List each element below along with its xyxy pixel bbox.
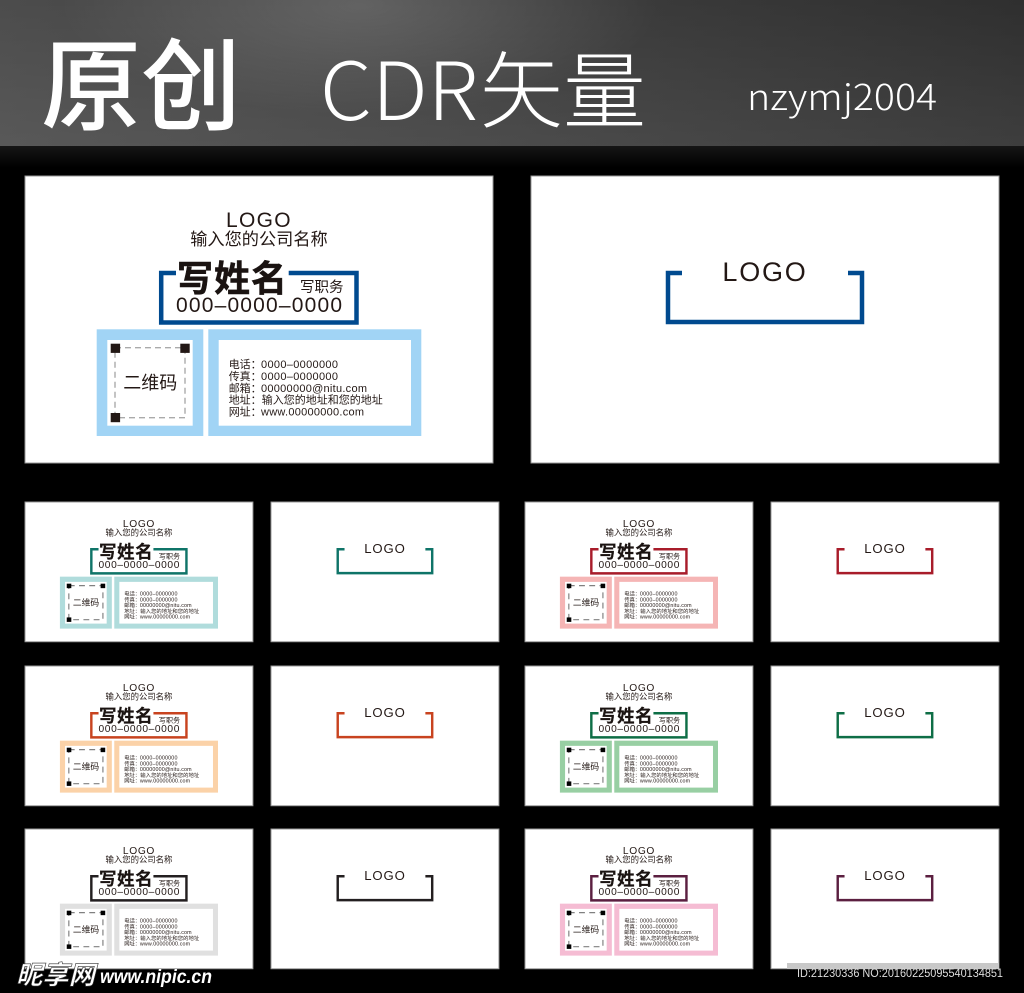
contact panel: 传真： [229,369,262,383]
logo text: LOGO [364,541,406,556]
person name: 写姓名 [599,542,653,562]
contact panel: 地址： [124,607,140,615]
contact panel: 网址： [624,777,640,785]
phone number: 000–0000–0000 [99,887,180,898]
job title: 写职务 [159,878,180,887]
company name: 输入您的公司名称 [106,855,172,865]
logo frame [838,549,932,573]
contact panel: www.00000000.com [639,615,691,621]
contact panel: 邮箱： [624,765,640,773]
QR panel [60,904,112,956]
person name: 写姓名 [99,542,153,562]
contact panel: 0000–0000000 [140,597,177,603]
contact panel: 传真： [124,595,140,603]
contact panel: 00000000@nitu.com [640,930,692,936]
contact panel: 输入您的地址和您的地址 [140,771,200,779]
contact panel: 00000000@nitu.com [261,383,367,395]
contact panel [114,904,218,956]
contact panel: 电话： [124,917,140,925]
contact panel: 00000000@nitu.com [140,767,192,773]
contact panel: 输入您的地址和您的地址 [140,607,200,615]
header banner [0,0,1024,168]
watermark: site logo: www.nipic.cn [100,967,212,988]
company name: 输入您的公司名称 [606,528,672,538]
job title: 写职务 [300,279,344,296]
contact panel: 电话： [229,358,262,371]
company name: 输入您的公司名称 [106,528,172,538]
green card: back [771,666,999,806]
contact panel: 输入您的地址和您的地址 [140,934,200,942]
QR panel: 二维码 [573,597,599,608]
logo frame [338,549,432,573]
logo text: LOGO [123,846,155,857]
contact panel [614,741,718,793]
QR panel: 二维码 [73,761,99,772]
orange card: back [271,666,499,806]
contact panel: 网址： [624,613,640,621]
black card: front [25,829,253,969]
logo text: LOGO [864,541,906,556]
name frame [91,713,186,737]
company name: 输入您的公司名称 [106,692,172,702]
phone number: 000–0000–0000 [599,887,680,898]
phone number: 000–0000–0000 [99,724,180,735]
name frame [591,876,686,900]
headline: original: 原创 [41,32,241,144]
logo text: LOGO [623,519,655,530]
logo frame [338,713,432,737]
phone number: 000–0000–0000 [599,724,680,735]
contact panel: 0000–0000000 [261,359,338,371]
logo text: LOGO [226,209,292,232]
contact panel: www.00000000.com [139,779,191,785]
job title: 写职务 [659,551,680,560]
QR panel: 二维码 [73,924,99,935]
contact panel: 邮箱： [124,928,140,936]
logo frame [838,713,932,737]
contact panel: www.00000000.com [639,779,691,785]
logo text: LOGO [864,868,906,883]
QR panel [560,904,612,956]
QR panel [560,577,612,629]
contact panel [208,329,421,436]
company name: 输入您的公司名称 [606,692,672,702]
contact panel: www.00000000.com [639,942,691,948]
logo text: LOGO [864,705,906,720]
contact panel: 网址： [124,940,140,948]
teal card: back [271,502,499,642]
company name: 输入您的公司名称 [606,855,672,865]
orange card: front [25,666,253,806]
logo text: LOGO [623,846,655,857]
name frame [591,549,686,573]
contact panel: 传真： [624,595,640,603]
QR panel: 二维码 [123,373,177,393]
QR panel [60,577,112,629]
contact panel: 0000–0000000 [640,756,677,762]
contact panel: 地址： [124,934,140,942]
contact panel: 地址： [229,392,262,406]
contact panel: 0000–0000000 [640,919,677,925]
QR panel: 二维码 [573,924,599,935]
contact panel: 0000–0000000 [261,371,338,383]
contact panel: 地址： [624,607,640,615]
contact panel: 0000–0000000 [140,592,177,598]
QR panel [560,741,612,793]
contact panel: 传真： [624,759,640,767]
QR panel: 二维码 [73,597,99,608]
author name: nzymj2004 [747,69,937,121]
logo text: LOGO [364,868,406,883]
contact panel: 邮箱： [624,928,640,936]
contact panel: 网址： [624,940,640,948]
contact panel: 地址： [624,771,640,779]
contact panel: 输入您的地址和您的地址 [262,392,383,406]
contact panel: www.00000000.com [139,942,191,948]
contact panel: 地址： [124,771,140,779]
logo frame [668,273,862,322]
contact panel: 00000000@nitu.com [140,930,192,936]
contact panel: 0000–0000000 [140,761,177,767]
contact panel: 00000000@nitu.com [640,603,692,609]
contact panel [614,577,718,629]
contact panel: 0000–0000000 [640,597,677,603]
job title: 写职务 [159,715,180,724]
contact panel: 邮箱： [229,381,262,395]
job title: 写职务 [159,551,180,560]
contact panel: 网址： [124,613,140,621]
large card: back [531,176,999,463]
company name: 输入您的公司名称 [190,229,328,249]
contact panel: 邮箱： [624,601,640,609]
contact panel: 00000000@nitu.com [640,767,692,773]
teal card: front [25,502,253,642]
headline: CDR: CDR [320,28,478,144]
contact panel: 电话： [124,590,140,598]
contact panel: 输入您的地址和您的地址 [640,771,700,779]
logo text: LOGO [123,519,155,530]
person name: 写姓名 [99,706,153,726]
contact panel: 电话： [124,754,140,762]
contact panel: 传真： [624,922,640,930]
logo text: LOGO [364,705,406,720]
watermark: site logo [16,960,212,990]
red card: front [525,502,753,642]
name frame [91,876,186,900]
contact panel: 电话： [624,754,640,762]
contact panel: 0000–0000000 [640,924,677,930]
contact panel: 0000–0000000 [640,761,677,767]
contact panel: 传真： [124,922,140,930]
logo frame [838,876,932,900]
contact panel: 输入您的地址和您的地址 [640,607,700,615]
job title: 写职务 [659,878,680,887]
contact panel [114,741,218,793]
contact panel: 电话： [624,590,640,598]
phone number: 000–0000–0000 [599,560,680,571]
logo text: LOGO [722,257,808,287]
contact panel [614,904,718,956]
black card: back [271,829,499,969]
plum card: back [771,829,999,969]
name frame [161,273,356,322]
contact panel: 传真： [124,759,140,767]
headline: vector: 矢量 [480,25,646,145]
contact panel: 0000–0000000 [140,919,177,925]
large card: front [25,176,493,463]
logo frame [338,876,432,900]
QR panel [97,329,203,436]
contact panel: 0000–0000000 [640,592,677,598]
name frame [591,713,686,737]
logo text: LOGO [123,683,155,694]
contact panel: 电话： [624,917,640,925]
contact panel [114,577,218,629]
watermark: site logo: 昵享网 [16,960,99,990]
contact panel: 00000000@nitu.com [140,603,192,609]
QR panel [60,741,112,793]
contact panel: 网址： [124,777,140,785]
person name: 写姓名 [99,869,153,889]
contact panel: 0000–0000000 [140,756,177,762]
contact panel: www.00000000.com [260,406,364,418]
contact panel: www.00000000.com [139,615,191,621]
green card: front [525,666,753,806]
contact panel: 网址： [229,404,262,418]
contact panel: 邮箱： [124,765,140,773]
job title: 写职务 [659,715,680,724]
logo text: LOGO [623,683,655,694]
person name: 写姓名 [599,869,653,889]
phone number: 000–0000–0000 [176,294,342,317]
watermark: image id: ID:21230336 NO:20160225095540134851 [797,966,1003,980]
phone number: 000–0000–0000 [99,560,180,571]
red card: back [771,502,999,642]
plum card: front [525,829,753,969]
person name: 写姓名 [599,706,653,726]
contact panel: 邮箱： [124,601,140,609]
person name: 写姓名 [177,258,287,299]
contact panel: 0000–0000000 [140,924,177,930]
contact panel: 输入您的地址和您的地址 [640,934,700,942]
name frame [91,549,186,573]
QR panel: 二维码 [573,761,599,772]
contact panel: 地址： [624,934,640,942]
